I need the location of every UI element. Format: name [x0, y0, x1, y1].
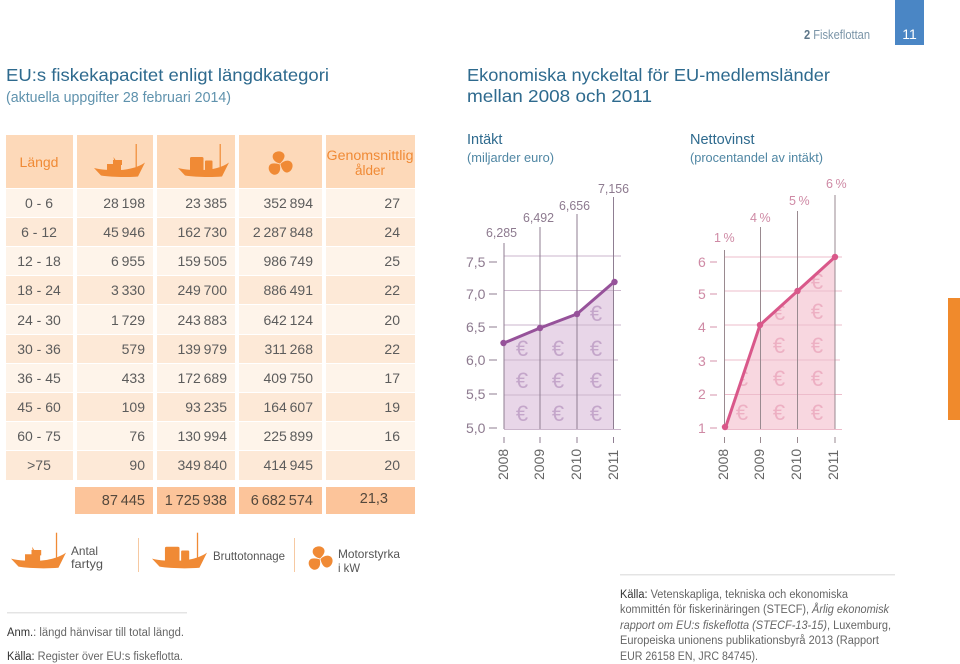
table values: 2 287 848 [253, 224, 313, 240]
chart: revenue line and area: € [590, 301, 602, 326]
table values: 20 [384, 457, 400, 473]
source, right: kommittén för fiskerinäringen (STECF), Årlig ekonomisk [620, 603, 890, 616]
table values: 172 689 [177, 370, 227, 386]
table values: 16 [384, 428, 400, 444]
chart: revenue line and area: 6,0 [466, 352, 486, 368]
chart: revenue line and area: € [552, 368, 564, 393]
chart: revenue line and area: 5,0 [466, 420, 486, 436]
table values: 20 [384, 312, 400, 328]
chart: net profit line and area: 4 % [750, 211, 771, 225]
table values: 22 [384, 282, 400, 298]
chart: revenue line and area: € [516, 336, 528, 361]
note and source, left [7, 612, 187, 663]
table values: 25 [384, 253, 400, 269]
source, right [620, 574, 895, 663]
table header row [6, 135, 415, 188]
chart: net profit line and area [698, 177, 847, 480]
table values: 28 198 [103, 195, 145, 211]
legend: i kW [338, 561, 361, 575]
table values: 3 330 [111, 282, 145, 298]
chart: net profit line and area: 6 [698, 254, 706, 270]
table values: 433 [122, 370, 145, 386]
legend [11, 533, 400, 575]
page header: section label and page number [804, 0, 924, 45]
table values: 109 [122, 399, 145, 415]
right title: mellan 2008 och 2011 [467, 86, 652, 106]
table header row: ålder [355, 163, 386, 178]
table values: 6 - 12 [21, 224, 57, 240]
heading: revenue: Intäkt [467, 132, 502, 148]
chart: revenue line and area: 6,285 [486, 226, 517, 240]
chart: revenue line and area: 2008 [495, 449, 511, 480]
table values: 12 - 18 [17, 253, 61, 269]
table totals row: 21,3 [360, 491, 388, 507]
legend: Motorstyrka [338, 547, 400, 561]
source, right: EUR 26158 EN, JRC 84745). [620, 651, 758, 663]
table values: 139 979 [177, 341, 227, 357]
chart: net profit line and area: € [773, 400, 785, 425]
chart: revenue line and area: € [516, 368, 528, 393]
chart: net profit line and area: 2011 [825, 450, 841, 480]
table values: 986 749 [263, 253, 313, 269]
table values: 579 [122, 341, 145, 357]
table values: 886 491 [263, 282, 313, 298]
chart: revenue line and area: 7,5 [466, 254, 486, 270]
chart: net profit line and area: € [811, 299, 823, 324]
table values: 409 750 [263, 370, 313, 386]
table values: 642 124 [263, 312, 313, 328]
chart: net profit line and area: 2010 [788, 449, 804, 480]
right title [467, 65, 830, 106]
table totals row: 6 682 574 [251, 493, 313, 509]
chart: net profit line and area: € [736, 366, 748, 391]
chart: revenue line and area: 7,0 [466, 286, 486, 302]
chart: net profit line and area: € [773, 300, 785, 325]
right title: Ekonomiska nyckeltal för EU-medlemsländer [467, 65, 830, 85]
source, right: rapport om EU:s fiskeflotta (STECF-13-15), Luxemburg, [620, 620, 891, 632]
chart: net profit line and area: 4 [698, 319, 706, 335]
table values: >75 [27, 457, 51, 473]
table values: 162 730 [177, 224, 227, 240]
table totals row: 1 725 938 [165, 493, 227, 509]
chart: revenue line and area [466, 182, 629, 480]
table values: 352 894 [263, 195, 313, 211]
chart: revenue line and area: 6,492 [523, 211, 554, 225]
chart: revenue line and area: € [590, 368, 602, 393]
left title: (aktuella uppgifter 28 februari 2014) [6, 89, 231, 106]
chart: net profit line and area: 2009 [751, 449, 767, 480]
source, right: Europeiska unionens publikationsbyrå 2013 (Rapport [620, 635, 880, 647]
table totals row [75, 487, 415, 514]
icon: gross tonnage [152, 533, 207, 568]
legend: Antal [71, 544, 98, 558]
table totals row: 87 445 [102, 493, 145, 509]
table values: 17 [384, 370, 400, 386]
table values: 1 729 [111, 312, 145, 328]
chart: revenue line and area: 2011 [605, 450, 621, 480]
table values: 45 946 [103, 224, 145, 240]
table values: 36 - 45 [17, 370, 61, 386]
chart: net profit line and area: 1 [698, 420, 706, 436]
table values: 93 235 [185, 399, 227, 415]
icon: engine power [304, 544, 336, 573]
table values: 24 [384, 224, 400, 240]
table header row: Längd [20, 154, 58, 170]
heading: revenue [467, 132, 554, 165]
icon: vessels [11, 533, 66, 568]
chart: revenue line and area: 7,156 [598, 182, 629, 196]
table values [17, 195, 400, 473]
legend: Bruttotonnage [213, 549, 285, 563]
left title [6, 65, 329, 106]
table values: 249 700 [177, 282, 227, 298]
chart: revenue line and area: € [590, 336, 602, 361]
chart: revenue line and area: 2009 [531, 449, 547, 480]
table values: 24 - 30 [17, 312, 61, 328]
table values: 164 607 [263, 399, 313, 415]
table values: 76 [129, 428, 145, 444]
heading: revenue: (miljarder euro) [467, 150, 554, 165]
chart: revenue line and area: € [552, 401, 564, 426]
left title: EU:s fiskekapacitet enligt längdkategori [6, 65, 329, 85]
heading: net profit: (procentandel av intäkt) [690, 150, 823, 165]
chart: revenue line and area: 5,5 [466, 386, 486, 402]
table values: 225 899 [263, 428, 313, 444]
chart: net profit line and area: € [811, 269, 823, 294]
chart: net profit line and area: 3 [698, 353, 706, 369]
table values: 6 955 [111, 253, 145, 269]
chart: net profit line and area: € [773, 366, 785, 391]
table values: 22 [384, 341, 400, 357]
chart: revenue line and area: 6,5 [466, 319, 486, 335]
table values: 311 268 [265, 341, 313, 357]
table values: 0 - 6 [25, 195, 53, 211]
chart: net profit line and area: 5 [698, 286, 706, 302]
chart: net profit line and area: € [811, 400, 823, 425]
source, right: Källa: Vetenskapliga, tekniska och ekonomiska [620, 589, 849, 601]
chart: net profit line and area: € [811, 333, 823, 358]
table values: 45 - 60 [17, 399, 61, 415]
table values: 159 505 [177, 253, 227, 269]
legend: fartyg [71, 557, 103, 571]
chart: net profit line and area: € [773, 333, 785, 358]
note and source, left: Källa: Register över EU:s fiskeflotta. [7, 651, 183, 663]
page header: section label and page number: 11 [902, 26, 917, 42]
chart: revenue line and area: € [590, 401, 602, 426]
table values: 23 385 [185, 195, 227, 211]
chart: net profit line and area: 1 % [714, 231, 735, 245]
table: fishing capacity by length category [6, 135, 415, 514]
table values: 414 945 [263, 457, 313, 473]
chart: revenue line and area: € [552, 336, 564, 361]
note and source, left: Anm.: längd hänvisar till total längd. [7, 627, 184, 639]
chart: revenue line and area: € [516, 401, 528, 426]
chart: net profit line and area: 2 [698, 386, 706, 402]
table values: 18 - 24 [17, 282, 61, 298]
table values: 27 [384, 195, 400, 211]
table values: 30 - 36 [17, 341, 61, 357]
table values: 19 [384, 399, 400, 415]
heading: net profit [690, 132, 823, 165]
page header: section label and page number: 2 Fiskeflottan [804, 28, 870, 42]
chart: revenue line and area: 2010 [568, 449, 584, 480]
table row bands [6, 189, 415, 450]
heading: net profit: Nettovinst [690, 132, 754, 148]
table values: 130 994 [177, 428, 227, 444]
orange side tab [948, 298, 960, 420]
chart: net profit line and area: € [811, 366, 823, 391]
table values: 349 840 [177, 457, 227, 473]
table header row: Genomsnittlig [326, 148, 414, 163]
table values: 243 883 [177, 312, 227, 328]
chart: net profit line and area: € [736, 400, 748, 425]
table values: 60 - 75 [17, 428, 61, 444]
chart: net profit line and area: 5 % [789, 194, 810, 208]
chart: revenue line and area: 6,656 [559, 199, 590, 213]
chart: net profit line and area: 6 % [826, 177, 847, 191]
chart: net profit line and area: 2008 [715, 449, 731, 480]
table values: 90 [129, 457, 145, 473]
